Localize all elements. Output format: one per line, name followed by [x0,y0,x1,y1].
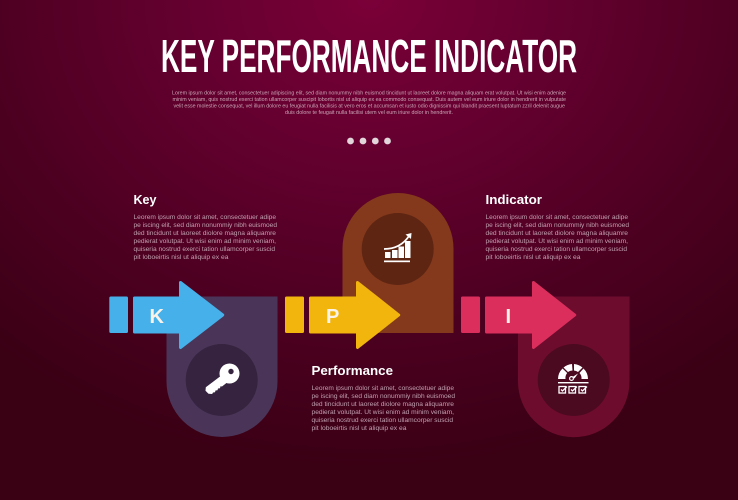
text block: performance: pit loboeirtis nisl ut aliquip ex ea [312,425,407,432]
text block: performance [312,385,455,432]
tab: K [109,296,128,333]
panel: performance [342,193,454,333]
icon circle: performance [362,213,434,285]
arrow: I: I [506,306,511,328]
panel: key [166,296,278,437]
text block: key: pit loboeirtis nisl ut aliquip ex ea [134,254,229,261]
text block: indicator: ded tincidunt ut laoreet diolore magna aliquamre [486,230,629,237]
text block: indicator: pe iscing elit, sed diam nonummiy nibh euismoed [486,222,629,229]
heading: Indicator: Indicator [486,192,542,207]
text block: performance: ded tincidunt ut laoreet diolore magna aliquamre [312,401,455,408]
icon: gauge [558,364,588,393]
arrow: P [310,282,399,348]
text block: key: pedierat volutpat. Ut wisi enim ad minim veniam, [134,238,276,245]
text block: key [134,214,277,261]
intro text block: minim veniam, quis nostrud exerci tation ullamcorper suscipit lobortis nisl ut aliquip ex ea commodo consequat. Duis autem vel eum iriure dolor in hendrerit in vulputate [172,97,566,103]
arrow: P: P [326,306,339,328]
tab: I [461,296,480,333]
text block: performance: quiseria nostrud exerci tation ullamcorper suscid [312,417,453,424]
icon: growth chart [384,233,412,262]
text block: indicator [486,214,629,261]
text block: indicator: quiseria nostrud exerci tation ullamcorper suscid [486,246,627,253]
text block: performance: pedierat volutpat. Ut wisi enim ad minim veniam, [312,409,454,416]
pagination dots [347,138,391,144]
text block: key: pe iscing elit, sed diam nonummiy nibh euismoed [134,222,277,229]
arrow: K: K [150,306,164,328]
arrow: K [134,282,223,348]
intro text block [172,90,566,116]
intro text block: velit esse molestie consequat, vel illum dolore eu feugiat nulla facilisis at vero eros et accumsan et iusto odio dignissim qui blandit praesent luptatum zzril delenit augue [174,104,565,110]
intro text block: duis dolore te feugait nulla facilisi utem vel eum iriure dolor in hendrerit. [285,110,453,116]
heading: Key: Key [134,192,157,207]
text block: indicator: Leorem ipsum dolor sit amet, consectetuer adipe [486,214,629,221]
arrow: I [486,282,575,348]
text block: indicator: pit loboeirtis nisl ut aliquip ex ea [486,254,581,261]
tab: P [285,296,304,333]
icon circle: key [186,344,258,416]
panel: indicator [518,296,630,437]
text block: performance: pe iscing elit, sed diam nonummiy nibh euismoed [312,393,455,400]
text block: key: Leorem ipsum dolor sit amet, consectetuer adipe [134,214,277,221]
text block: key: ded tincidunt ut laoreet diolore magna aliquamre [134,230,277,237]
text block: performance: Leorem ipsum dolor sit amet, consectetuer adipe [312,385,455,392]
text block: indicator: pedierat volutpat. Ut wisi enim ad minim veniam, [486,238,628,245]
text block: key: quiseria nostrud exerci tation ullamcorper suscid [134,246,275,253]
heading: Performance: Performance [312,363,393,378]
icon: key [206,364,240,394]
intro text block: Lorem ipsum dolor sit amet, consectetuer adipiscing elit, sed diam nonummy nibh euismod tincidunt ut laoreet dolore magna aliquam erat volutpat. Ut wisi enim adeniqe [172,90,566,96]
icon circle: indicator [538,344,610,416]
